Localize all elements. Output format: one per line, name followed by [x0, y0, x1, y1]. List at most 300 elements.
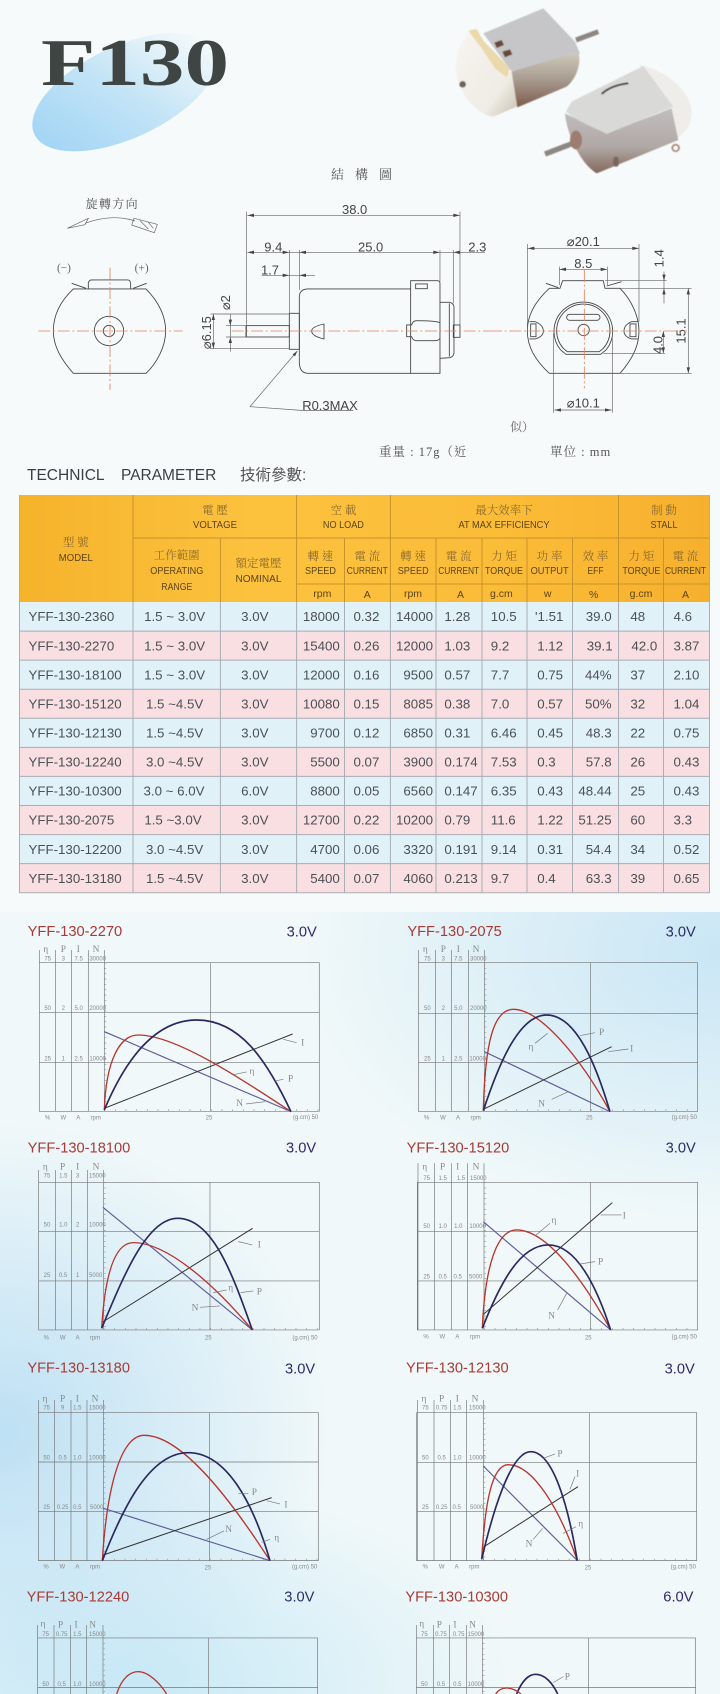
axis labels: 25 [422, 1505, 429, 1511]
chart voltage: 3.0V [285, 1361, 315, 1377]
header: nominal: NOMINAL [236, 573, 282, 585]
header: sub columns: 力 矩 [491, 549, 517, 563]
axis labels: 1 [62, 1057, 66, 1063]
row YFF-130-2075: 10200 [396, 813, 433, 828]
row YFF-130-15120: 1.04 [674, 696, 699, 711]
header: units: rpm [313, 588, 332, 600]
axis labels: 10000 [89, 1222, 106, 1228]
motor 2 side face [565, 108, 678, 173]
row YFF-130-2360: 14000 [396, 609, 433, 624]
row YFF-130-2075: 51.25 [578, 813, 612, 828]
axis labels: 25 [205, 1565, 212, 1571]
row YFF-130-13180: 5400 [310, 871, 340, 886]
row YFF-130-2075: 12700 [303, 813, 340, 828]
axis labels: 2.5 [74, 1057, 83, 1063]
row YFF-130-18100: 2.10 [674, 667, 699, 682]
dimension 9.4: 9.4 [264, 239, 282, 254]
drawing: front view with dimensions [490, 234, 692, 413]
blue ellipse behind title [15, 8, 235, 176]
header: at max efficiency [458, 503, 550, 531]
curve efficiency [483, 1009, 610, 1112]
curve P [482, 1452, 577, 1561]
curve N [104, 1032, 291, 1112]
row YFF-130-12130: YFF-130-12130 [28, 726, 122, 740]
axis labels: I [453, 1620, 457, 1630]
motor 2 bushing [570, 131, 582, 149]
row YFF-130-2075: 0.79 [444, 813, 470, 828]
header: sub columns: CURRENT [438, 565, 480, 577]
row YFF-130-10300: 3.0 ~ 6.0V [144, 784, 205, 799]
row YFF-130-13180: 1.5 ~4.5V [146, 871, 203, 886]
header: model: MODEL [59, 552, 93, 564]
axis labels: (g.cm) 50 [672, 1115, 698, 1121]
row YFF-130-15120: 1.5 ~4.5V [146, 696, 203, 711]
row YFF-130-12130: 6850 [403, 726, 433, 740]
centre lines [490, 270, 687, 388]
axis labels: 1.5 [59, 1173, 68, 1179]
header: units: A [364, 589, 371, 601]
axis labels: 1.0 [454, 1224, 463, 1230]
table: motor parameters [20, 495, 710, 893]
row YFF-130-18100: 9500 [403, 667, 433, 682]
motor 1 terminal strip [468, 29, 510, 77]
curve efficiency [102, 1435, 270, 1561]
axis labels: 0.5 [437, 1682, 446, 1688]
curve I [484, 1487, 578, 1547]
row YFF-130-2270: 1.5 ~ 3.0V [144, 638, 205, 653]
curve I [483, 1047, 612, 1109]
axis labels: 0.5 [57, 1682, 66, 1688]
curve labels [529, 1028, 633, 1110]
axis labels: 15000 [89, 1173, 106, 1179]
header: sub columns: 電 流 [354, 549, 381, 563]
header: sub columns: OUTPUT [531, 565, 569, 577]
axis labels: W [439, 1335, 445, 1341]
axis labels: 10000 [89, 1682, 106, 1688]
header: operating range: RANGE [161, 581, 192, 593]
curve labels: P [288, 1075, 293, 1085]
row YFF-130-10300: 6.35 [491, 784, 517, 799]
axis labels: rpm [470, 1335, 480, 1341]
header: sub columns: TORQUE [485, 565, 523, 577]
axis labels: 1 [442, 1057, 446, 1063]
axis labels: A [75, 1565, 79, 1571]
axis labels: P [440, 1163, 445, 1173]
axis labels: 15000 [89, 1405, 106, 1411]
motor 1 terminal holes [494, 40, 512, 57]
row YFF-130-18100: 44% [585, 667, 612, 682]
axis labels: A [455, 1565, 459, 1571]
row YFF-130-10300: YFF-130-10300 [28, 784, 122, 799]
axis labels: 50 [423, 1224, 431, 1230]
axis labels: % [43, 1565, 49, 1571]
axis labels: W [60, 1335, 66, 1341]
curve N [103, 1508, 270, 1561]
row YFF-130-12240: 57.8 [586, 755, 612, 770]
row YFF-130-2270: 3.87 [674, 638, 699, 653]
chart grid [416, 1625, 696, 1694]
curve labels: N [548, 1311, 555, 1321]
chart title: YFF-130-2075 [407, 924, 502, 940]
header: at max efficiency: AT MAX EFFICIENCY [458, 519, 550, 531]
row YFF-130-12240: 3.0V [241, 755, 269, 770]
axis labels: I [76, 1163, 79, 1173]
header: voltage: VOLTAGE [193, 519, 237, 531]
row YFF-130-12130 [20, 718, 710, 747]
header: sub columns: 轉 速 [400, 549, 427, 563]
axis labels: η [43, 945, 48, 955]
note: weight: 重量 : 17g（近 [379, 444, 467, 459]
row YFF-130-2360: 0.32 [353, 609, 379, 624]
axis labels: P [60, 1395, 65, 1405]
axis labels: (g.cm) 50 [671, 1565, 697, 1571]
motor 2 shaft [545, 142, 577, 154]
row YFF-130-12200: 9.14 [491, 842, 517, 857]
motor 1 white end cap [456, 32, 518, 117]
row YFF-130-12200: 34 [630, 842, 645, 857]
header: operating range: 工作範圍 [154, 548, 200, 562]
row YFF-130-12130: 0.45 [537, 726, 563, 740]
row YFF-130-2270: 39.1 [587, 638, 613, 653]
axis labels: 15000 [469, 1405, 486, 1411]
dimension arrows [528, 247, 690, 412]
axis labels: W [439, 1565, 445, 1571]
chart title: YFF-130-12130 [406, 1361, 509, 1377]
curve labels: η [228, 1284, 233, 1294]
axis labels: (g.cm) 50 [292, 1565, 318, 1571]
header: units [313, 588, 689, 601]
axis labels: 1.5 [73, 1632, 82, 1638]
header: no load [323, 503, 364, 531]
axis labels: η [419, 1620, 424, 1630]
row YFF-130-2360 [20, 602, 710, 631]
row YFF-130-18100: 12000 [303, 667, 340, 682]
row YFF-130-12200: 3.0V [241, 842, 269, 857]
row YFF-130-15120: 7.0 [491, 696, 509, 711]
chart: YFF-130-10300 [405, 1589, 696, 1694]
axis labels: 1.5 [453, 1405, 462, 1411]
header: units: rpm [404, 588, 422, 600]
curve P [102, 1453, 270, 1561]
axis labels: 2 [442, 1006, 446, 1012]
row YFF-130-15120: YFF-130-15120 [28, 696, 122, 711]
header: no load: NO LOAD [323, 519, 364, 531]
dimension shaft diameter 2: ⌀2 [218, 295, 233, 310]
row YFF-130-15120: 3.0V [241, 696, 269, 711]
row YFF-130-2075: 1.5 ~3.0V [144, 813, 202, 828]
axis labels: 0.75 [56, 1632, 68, 1638]
row YFF-130-18100: 7.7 [491, 667, 509, 682]
axis labels: 15000 [470, 1176, 487, 1182]
chart: YFF-130-13180 [27, 1361, 318, 1571]
row YFF-130-12130: 9700 [310, 726, 340, 740]
header: sub columns: 電 流 [446, 549, 472, 563]
axis labels: 50 [421, 1682, 428, 1688]
motor 2 terminal loop [672, 145, 679, 151]
axis labels: P [437, 1620, 442, 1630]
curve P [104, 1020, 291, 1112]
row YFF-130-2360: 39.0 [586, 609, 612, 624]
axis labels: 10000 [468, 1682, 485, 1688]
label: negative terminal: (−) [57, 262, 71, 274]
axis labels: A [76, 1116, 80, 1122]
row YFF-130-2075: 3.3 [674, 813, 692, 828]
axis labels: % [423, 1335, 429, 1341]
header: model: 型 號 [63, 535, 89, 549]
row YFF-130-2270: 1.03 [444, 638, 470, 653]
curve labels: P [252, 1488, 257, 1498]
note: approximate: 似） [510, 420, 534, 434]
row YFF-130-18100: 3.0V [241, 667, 269, 682]
axis labels: 5000 [470, 1505, 484, 1511]
axis labels: 25 [586, 1116, 593, 1122]
curve labels: N [526, 1540, 533, 1550]
row YFF-130-2360: 3.0V [241, 609, 269, 624]
axis labels: η [43, 1395, 48, 1405]
chart voltage: 6.0V [663, 1590, 694, 1606]
row YFF-130-12130: 3.0V [241, 726, 269, 740]
row YFF-130-15120: 32 [630, 696, 645, 711]
axis labels: N [92, 1395, 99, 1405]
axis labels: 10000 [469, 1224, 487, 1230]
row YFF-130-12200: 54.4 [586, 842, 612, 857]
row YFF-130-12130: 0.12 [353, 726, 379, 740]
row YFF-130-15120 [20, 689, 710, 718]
axis labels: 3 [62, 957, 66, 963]
curve labels: η [552, 1216, 557, 1226]
label: corner radius: R0.3MAX [302, 398, 358, 413]
axis labels: 50 [43, 1455, 51, 1461]
row YFF-130-13180: 0.65 [674, 871, 699, 886]
curve N [484, 1052, 610, 1112]
chart voltage: 3.0V [287, 925, 317, 941]
curve labels [535, 1211, 626, 1321]
chart title: YFF-130-12240 [27, 1589, 129, 1605]
row YFF-130-18100 [20, 660, 710, 689]
axis labels: 1.0 [438, 1224, 447, 1230]
header: sub columns: 轉 速 [308, 549, 334, 563]
motor 2 top face [566, 66, 673, 134]
curve labels: I [258, 1240, 261, 1250]
row YFF-130-13180: 0.07 [353, 871, 379, 886]
curve P [483, 1015, 610, 1112]
curve I [483, 1203, 612, 1315]
axis labels: 50 [422, 1455, 429, 1461]
chart voltage: 3.0V [284, 1590, 315, 1606]
row YFF-130-12200 [20, 835, 710, 864]
dimension collar diameter 6.15: ⌀6.15 [199, 316, 214, 349]
header: sub columns: 功 率 [537, 549, 563, 563]
header: sub columns: CURRENT [665, 565, 706, 577]
row YFF-130-12200: 3320 [403, 842, 433, 857]
axis labels: 9 [61, 1405, 65, 1411]
axis labels: 0.75 [435, 1632, 447, 1638]
axis labels: 25 [43, 1505, 51, 1511]
note: unit: 單位 : mm [550, 445, 611, 459]
centre lines [38, 268, 183, 390]
row YFF-130-15120: 0.38 [444, 696, 470, 711]
axis labels: 0.5 [453, 1682, 462, 1688]
axis labels: 3 [442, 957, 446, 963]
axis labels: 10000 [469, 1057, 487, 1063]
axis labels: 25 [206, 1116, 213, 1122]
heading: technical parameter [27, 466, 306, 484]
axis labels: (g.cm) 50 [293, 1115, 319, 1121]
axis labels: 0.25 [57, 1505, 69, 1511]
dimension lines [211, 212, 485, 411]
axis labels: 2.5 [454, 1057, 463, 1063]
axis labels: 5000 [469, 1274, 483, 1280]
curve N [483, 1222, 611, 1330]
axis labels [422, 1163, 698, 1341]
motor side outline [246, 281, 460, 373]
curve labels: P [598, 1258, 603, 1268]
axis labels: rpm [470, 1116, 481, 1122]
axis labels: N [469, 1620, 476, 1630]
curve P [482, 1245, 611, 1330]
row YFF-130-10300: 6.0V [241, 784, 269, 799]
chart voltage: 3.0V [666, 925, 696, 941]
axis labels: rpm [90, 1335, 100, 1341]
axis labels: 10000 [89, 1455, 106, 1461]
curve label P [553, 1672, 570, 1683]
row YFF-130-15120: 50% [585, 696, 612, 711]
row YFF-130-2270: 12000 [396, 638, 433, 653]
row YFF-130-2360: 10.5 [491, 609, 517, 624]
axis labels [43, 1395, 318, 1571]
curve labels: I [623, 1211, 626, 1221]
dimension arrows [212, 214, 460, 356]
axis labels: 30000 [470, 957, 487, 963]
curve labels: P [599, 1028, 604, 1038]
axis labels: 15000 [89, 1632, 106, 1638]
axis labels: W [59, 1565, 65, 1571]
axis labels: 0.5 [73, 1505, 82, 1511]
row YFF-130-12200: YFF-130-12200 [28, 842, 122, 857]
curve labels: N [538, 1100, 545, 1110]
curve labels: N [236, 1099, 243, 1109]
row YFF-130-2075: 3.0V [241, 813, 269, 828]
dimension 1.4: 1.4 [651, 249, 666, 267]
header: sub columns: TORQUE [622, 565, 660, 577]
row YFF-130-12200: 4700 [310, 842, 340, 857]
axis labels: rpm [91, 1116, 101, 1122]
axis labels: A [76, 1335, 80, 1341]
curve labels [192, 1240, 262, 1314]
axis labels: 1.5 [438, 1176, 447, 1182]
motor rear outline [53, 280, 166, 373]
curve efficiency [482, 1465, 577, 1561]
row YFF-130-10300: 25 [630, 784, 645, 799]
chart grid [417, 1163, 698, 1330]
chart: YFF-130-2075 [407, 924, 698, 1122]
row YFF-130-2360: '1.51 [535, 609, 563, 624]
axis labels: % [424, 1116, 430, 1122]
axis labels: N [473, 1163, 480, 1173]
row YFF-130-12200: 3.0 ~4.5V [146, 842, 203, 857]
row YFF-130-13180: 9.7 [491, 871, 509, 886]
row YFF-130-10300 [20, 776, 710, 806]
row YFF-130-12200: 0.191 [444, 842, 478, 857]
curve I [102, 1228, 253, 1323]
header: stall [650, 503, 678, 531]
header: nominal [236, 557, 282, 585]
drawing: side view with dimensions [199, 202, 490, 413]
row YFF-130-10300: 8800 [310, 784, 340, 799]
axis labels: 2 [76, 1222, 80, 1228]
row YFF-130-18100: 1.5 ~ 3.0V [144, 667, 205, 682]
dimension diameter 10.1: ⌀10.1 [567, 396, 600, 411]
row YFF-130-13180: 4060 [403, 871, 433, 886]
row YFF-130-2270: 1.12 [537, 638, 563, 653]
row YFF-130-2270: 9.2 [491, 638, 509, 653]
row YFF-130-10300: 0.43 [674, 784, 699, 799]
dimension 4.0: 4.0 [650, 336, 665, 354]
row YFF-130-2075: 1.22 [537, 813, 563, 828]
axis labels [43, 945, 319, 1122]
axis labels: 50 [42, 1682, 50, 1688]
axis labels: 25 [423, 1274, 431, 1280]
row YFF-130-12130: 0.31 [444, 726, 470, 740]
header: nominal: 額定電壓 [236, 557, 282, 570]
axis labels: 0.75 [436, 1405, 448, 1411]
axis labels: 50 [424, 1006, 431, 1012]
row YFF-130-12130: 6.46 [491, 726, 517, 740]
axis labels: 50 [44, 1222, 51, 1228]
row YFF-130-18100: 0.16 [353, 667, 379, 682]
axis labels: I [456, 1395, 459, 1405]
axis labels: 20000 [470, 1006, 487, 1012]
header: voltage [193, 504, 237, 531]
axis labels: N [93, 945, 100, 955]
axis labels: 7.5 [74, 957, 83, 963]
row YFF-130-12240: YFF-130-12240 [28, 755, 122, 770]
axis labels: 75 [421, 1632, 428, 1638]
curve labels: I [576, 1470, 579, 1480]
axis labels: η [422, 1395, 427, 1405]
row YFF-130-15120: 8085 [403, 696, 433, 711]
row YFF-130-13180: 0.213 [444, 871, 478, 886]
motor 2 slot [602, 83, 628, 94]
axis labels: P [439, 1395, 444, 1405]
axis labels: 0.5 [58, 1455, 67, 1461]
header: sub columns: 力 矩 [628, 549, 655, 563]
header: sub columns: 效 率 [583, 549, 609, 563]
header: no load: 空 載 [330, 503, 357, 517]
header: units: g.cm [630, 588, 653, 600]
curve labels: η [529, 1043, 534, 1053]
motor 1 rear bushing [459, 81, 466, 88]
axis labels: η [41, 1620, 46, 1630]
header: at max efficiency: 最大效率下 [475, 503, 533, 517]
axis labels: η [423, 945, 428, 955]
curve N [483, 1466, 577, 1561]
axis labels: 5.0 [74, 1006, 83, 1012]
axis labels: N [89, 1620, 96, 1630]
curve efficiency [104, 1035, 291, 1112]
heading: technical parameter: 技術參數: [240, 466, 306, 484]
header: units: A [682, 589, 689, 601]
curve labels: I [630, 1045, 633, 1055]
chart: YFF-130-18100 [28, 1140, 319, 1341]
curve labels: P [257, 1288, 262, 1298]
row YFF-130-12130: 0.75 [674, 726, 699, 740]
header: units: A [457, 589, 464, 601]
axis labels: 0.5 [452, 1505, 461, 1511]
header: sub columns [305, 549, 706, 577]
row YFF-130-2360: 48 [630, 609, 645, 624]
axis labels: N [472, 1395, 479, 1405]
